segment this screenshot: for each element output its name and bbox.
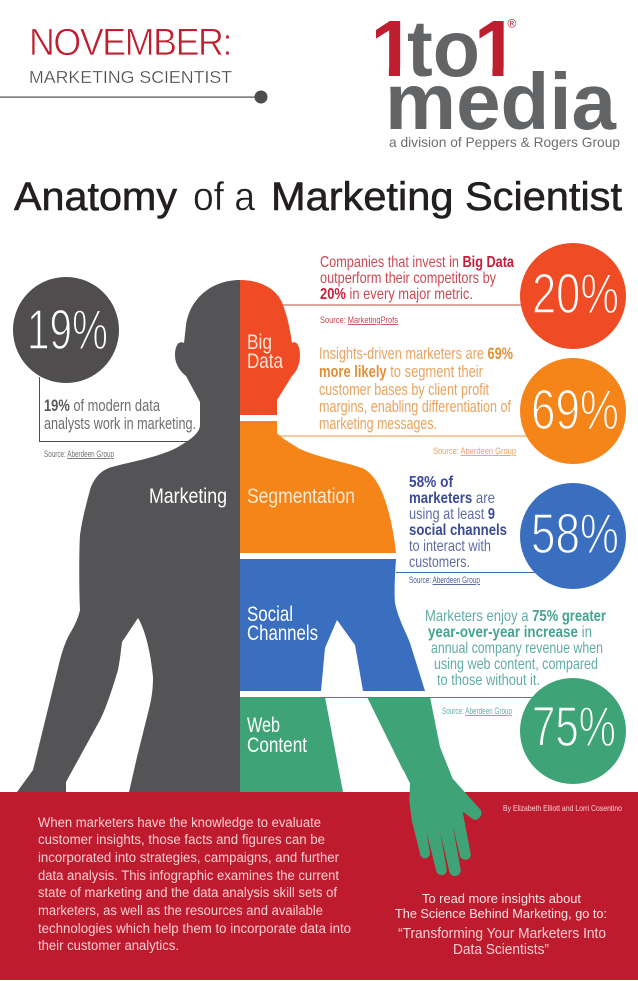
callout: 19%: 19% [27,298,108,362]
header line with dot [0,90,268,104]
callout: 75% web content: to those without it. [437,672,540,689]
footer paragraph: When marketers have the knowledge to evaluate [38,815,321,830]
callout: 58% social channels: customers. [409,554,470,571]
callout: 69% segmentation: Insights-driven marketers are 69% [319,344,513,363]
callout: 20% big data: Companies that invest in Big Data [320,254,514,271]
call to action: The Science Behind Marketing, go to: [395,906,607,921]
body labels: Data [247,350,283,373]
logo: 1to1 media: to [407,4,480,93]
callout: 19%: Source: Aberdeen Group [44,449,114,459]
heading: month [29,22,232,87]
callout: 69% segmentation [279,344,626,464]
footer paragraph: customer insights, those facts and figures can be [38,832,325,847]
callout: 20% big data [283,243,626,349]
footer paragraph: their customer analytics. [38,938,179,953]
title: Marketing Scientist [271,175,622,219]
body: segmentation torso [240,421,396,553]
logo: 1to1 media [368,4,620,150]
logo: 1to1 media: a division of Peppers & Rogers Group [389,134,620,150]
body: social channels [240,559,425,691]
call to action: Data Scientists” [453,941,549,958]
callout: 20% big data: Source: MarketingProfs [320,315,398,325]
callout: 58% social channels: to interact with [409,538,491,555]
footer paragraph: incorporated into strategies, campaigns, and further [38,850,339,865]
body labels: Big [247,331,272,354]
title [14,175,622,219]
callout: 20% big data: 20% in every major metric. [320,286,473,303]
callout: 69% segmentation: marketing messages. [319,414,437,433]
callout: 19% [13,277,196,459]
body labels: Segmentation [247,485,355,508]
callout: 75% web content: year-over-year increase in [428,624,592,641]
body labels [149,331,355,757]
footer paragraph: state of marketing and the data analysis skill sets of [38,885,337,900]
callout: 69% segmentation: Source: Aberdeen Group [433,446,516,456]
callout: 69% segmentation: margins, enabling differentiation of [319,397,511,416]
heading: month: NOVEMBER: [29,22,231,64]
body: web content and hand [240,697,481,876]
callout: 69% segmentation: more likely to segment their [319,362,483,381]
callout: 75% web content: using web content, compared [434,656,598,673]
callout: 75% web content [320,608,626,784]
heading: month: MARKETING SCIENTIST [29,67,232,87]
title: of a [193,175,255,219]
footer paragraph: marketers, as well as the resources and available [38,903,323,918]
logo: 1to1 media: ® [508,16,516,30]
callout: 20% big data: outperform their competitors by [320,270,496,287]
call to action: To read more insights about [422,891,581,906]
callout: 75% web content: Marketers enjoy a 75% greater [425,608,606,625]
title: Anatomy [14,175,177,219]
body labels: Content [247,734,307,757]
body labels: Channels [247,622,318,645]
callout: 19%: analysts work in marketing. [44,414,196,433]
callout: 58% social channels: 58% of [409,474,454,491]
footer paragraph [38,815,351,953]
body: left marketing half [17,280,240,792]
footer panel [0,792,638,980]
logo: 1to1 media: 1 [474,4,518,93]
callout: 58% social channels: using at least 9 [409,506,495,523]
body labels: Web [247,714,280,737]
call to action [395,891,607,958]
call to action: “Transforming Your Marketers Into [398,925,606,942]
logo: 1to1 media: 1 [370,4,415,93]
footer paragraph: data analysis. This infographic examines the current [38,868,339,883]
callout: 19%: 19% of modern data [44,396,160,415]
callout: 58% social channels: Source: Aberdeen Group [409,575,480,585]
callout: 58% social channels: marketers are [409,490,495,507]
body labels: Social [247,603,293,626]
callout: 69% segmentation: customer bases by client profit [319,380,489,399]
callout: 58% social channels [396,474,626,589]
callout: 58% social channels: social channels [409,522,507,539]
logo: 1to1 media: media [385,57,616,146]
callout: 75% web content: Source: Aberdeen Group [442,706,512,716]
body labels: Marketing [149,485,227,508]
footer paragraph: technologies which help them to incorporate data into [38,921,351,936]
body: big data head [240,280,300,415]
